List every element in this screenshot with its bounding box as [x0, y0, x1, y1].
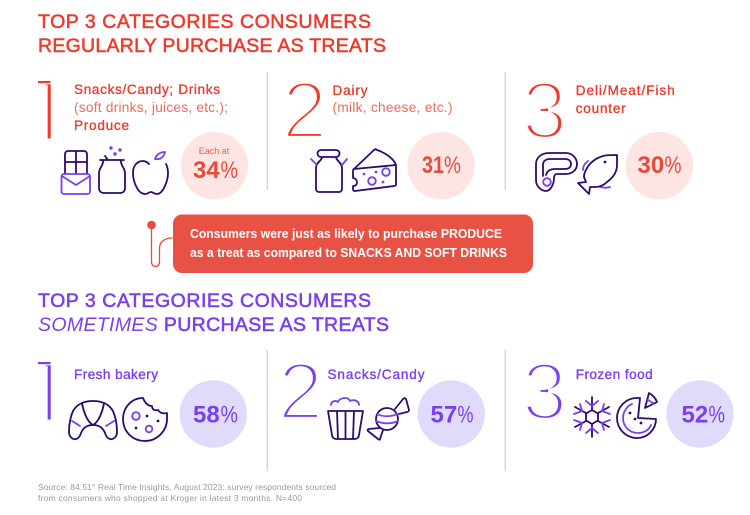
source note	[38, 482, 336, 503]
number 3: 3	[522, 66, 567, 156]
icon: milk can	[311, 150, 347, 192]
callout box	[173, 214, 533, 273]
title: sometimes purchase	[38, 290, 389, 336]
stat circle: 57%	[418, 380, 485, 448]
number 2: 2	[282, 66, 327, 156]
connector line	[147, 221, 172, 266]
panel: regular rank 3	[522, 66, 693, 199]
stat circle: 34%: Each at	[199, 146, 230, 156]
icon: wrapped candy	[368, 398, 409, 440]
number 1	[38, 362, 51, 420]
stat circle: 34%: %	[220, 157, 238, 184]
stat circle: 58%: %	[220, 402, 238, 429]
label: fresh bakery: Fresh bakery	[74, 367, 158, 382]
label: snacks, drinks, produce: (soft drinks, juices, etc.);	[74, 100, 228, 115]
label: frozen food: Frozen food	[576, 367, 653, 382]
number 1	[38, 81, 51, 138]
stat circle: 30%: 30	[638, 152, 664, 179]
icon: pizza	[617, 393, 657, 438]
icon: fish	[578, 155, 617, 194]
panel: sometimes rank 3	[522, 347, 734, 448]
panel: sometimes rank 2	[278, 347, 485, 448]
panel: sometimes rank 1	[38, 362, 247, 448]
label: snacks, drinks, produce	[74, 82, 228, 133]
label: deli, meat, fish: counter	[576, 101, 626, 116]
label: dairy	[332, 83, 452, 115]
label: snacks, drinks, produce: Snacks/Candy; Drinks	[74, 82, 220, 97]
stat circle: 31%	[407, 132, 475, 199]
stat circle: 52%	[666, 380, 734, 448]
callout: produce vs snacks	[147, 214, 533, 273]
stat circle: 52%: %	[708, 402, 725, 429]
icon: snowflake	[574, 397, 610, 437]
number 2: 2	[278, 347, 323, 437]
stat circle: 57%: 57	[430, 402, 457, 429]
label: deli, meat, fish: Deli/Meat/Fish	[576, 83, 675, 98]
label: dairy: (milk, cheese, etc.)	[332, 100, 452, 115]
stat circle: 30%	[626, 132, 693, 199]
source note: Source: 84.51° Real Time Insights, August 2023; survey respondents sourced	[38, 482, 336, 492]
callout text	[190, 227, 507, 260]
title: sometimes purchase: SOMETIMES PURCHASE AS TREATS	[38, 314, 389, 336]
stat circle: 34%	[181, 132, 248, 199]
label: snacks, candy: Snacks/Candy	[328, 367, 425, 382]
stat circle: 58%: 58	[193, 402, 220, 429]
stat circle: 31%: 31	[422, 152, 444, 179]
icon: cheese	[353, 149, 396, 191]
title: regularly purchase: TOP 3 CATEGORIES CONSUMERS	[38, 11, 371, 33]
stat circle: 31%: %	[444, 152, 461, 179]
number 1: 1	[22, 344, 73, 446]
panel: regular rank 2	[282, 66, 475, 199]
stat circle: 30%: %	[664, 152, 682, 179]
stat circle: 57%: %	[458, 402, 474, 429]
title: regularly purchase: REGULARLY PURCHASE AS TREATS	[38, 35, 386, 57]
icon: cookie	[123, 398, 167, 441]
label: snacks, drinks, produce: Produce	[74, 118, 129, 133]
icon: meat cut	[536, 153, 577, 191]
icon: popcorn	[328, 398, 363, 439]
label: dairy: Dairy	[332, 83, 368, 98]
stat circle: 58%	[180, 380, 247, 448]
title: sometimes purchase: TOP 3 CATEGORIES CONSUMERS	[38, 290, 371, 312]
title: regularly purchase	[38, 11, 386, 57]
number 3: 3	[522, 347, 567, 437]
icon: apple	[133, 152, 168, 194]
source note: from consumers who shopped at Kroger in latest 3 months. N=400	[38, 493, 302, 503]
label: deli, meat, fish	[576, 83, 675, 116]
icon: croissant	[69, 401, 117, 439]
icon: chocolate bar	[62, 151, 90, 194]
stat circle: 34%: 34	[193, 157, 220, 184]
callout text: Consumers were just as likely to purchase PRODUCE	[190, 227, 502, 241]
number 1: 1	[22, 63, 73, 165]
stat circle: 52%: 52	[682, 402, 708, 429]
icon: jar	[99, 146, 125, 193]
panel: regular rank 1	[38, 81, 248, 200]
callout text: as a treat as compared to SNACKS AND SOFT DRINKS	[190, 246, 507, 260]
